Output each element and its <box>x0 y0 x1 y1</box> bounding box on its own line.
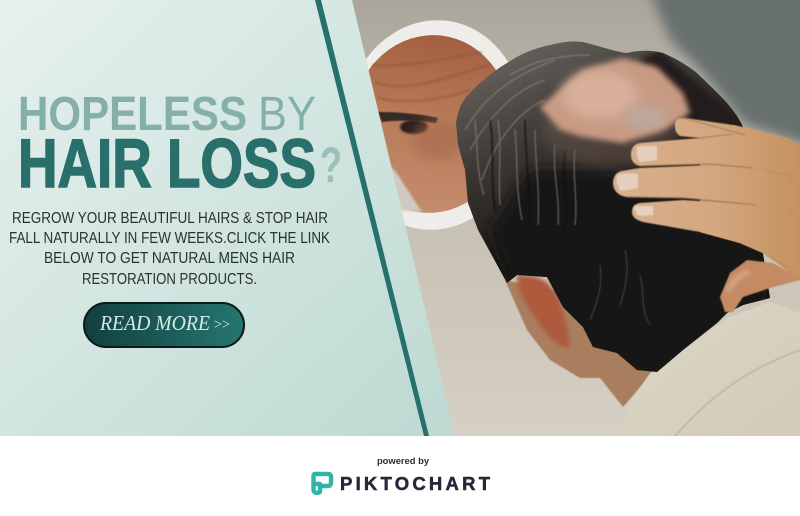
mirror <box>332 10 536 240</box>
finger 4 <box>632 200 800 270</box>
knuckle and crease lines <box>627 118 757 205</box>
piktochart wordmark: PIKTOCHART <box>340 473 491 494</box>
title line two: HAIR LOSS <box>18 125 316 202</box>
button label: READ MORE <box>99 311 210 335</box>
ear <box>517 275 570 347</box>
hand <box>613 118 800 312</box>
jacket <box>621 302 800 436</box>
description text <box>9 210 331 288</box>
bald patch <box>540 58 690 143</box>
description text: BELOW TO GET NATURAL MENS HAIR <box>44 250 295 267</box>
finger 2 <box>631 138 800 175</box>
button chevrons: >> <box>214 317 230 333</box>
head and neck skin <box>505 280 655 407</box>
diagonal stripe <box>315 0 429 436</box>
dark background top right <box>645 0 800 150</box>
description text: FALL NATURALLY IN FEW WEEKS.CLICK THE LINK <box>9 230 331 247</box>
finger 3 <box>613 165 800 210</box>
mirror lower left background <box>375 150 422 212</box>
finger top <box>675 118 800 170</box>
title <box>18 88 342 202</box>
wall background <box>340 0 800 436</box>
left teal panel <box>0 0 455 436</box>
title word hopeless: HOPELESS <box>18 88 247 141</box>
piktochart logo icon <box>314 474 331 493</box>
question mark: ? <box>320 137 342 193</box>
description text: RESTORATION PRODUCTS. <box>82 271 257 288</box>
thumb <box>720 260 800 312</box>
mirror eyebrow and eye <box>378 112 438 123</box>
title word by: BY <box>258 88 316 141</box>
description text: REGROW YOUR BEAUTIFUL HAIRS & STOP HAIR <box>12 210 328 227</box>
powered by: powered by <box>377 455 430 466</box>
photo: man checking hair loss in a mirror <box>332 0 800 436</box>
dark nape hair <box>490 170 770 380</box>
back of hand <box>700 125 800 280</box>
thinning transition <box>542 118 679 172</box>
read more button <box>84 303 244 347</box>
dark crown hair right <box>639 51 743 127</box>
hair <box>450 35 780 380</box>
grey hair strands <box>465 55 590 225</box>
footer <box>0 436 800 516</box>
finger nails <box>617 146 657 216</box>
